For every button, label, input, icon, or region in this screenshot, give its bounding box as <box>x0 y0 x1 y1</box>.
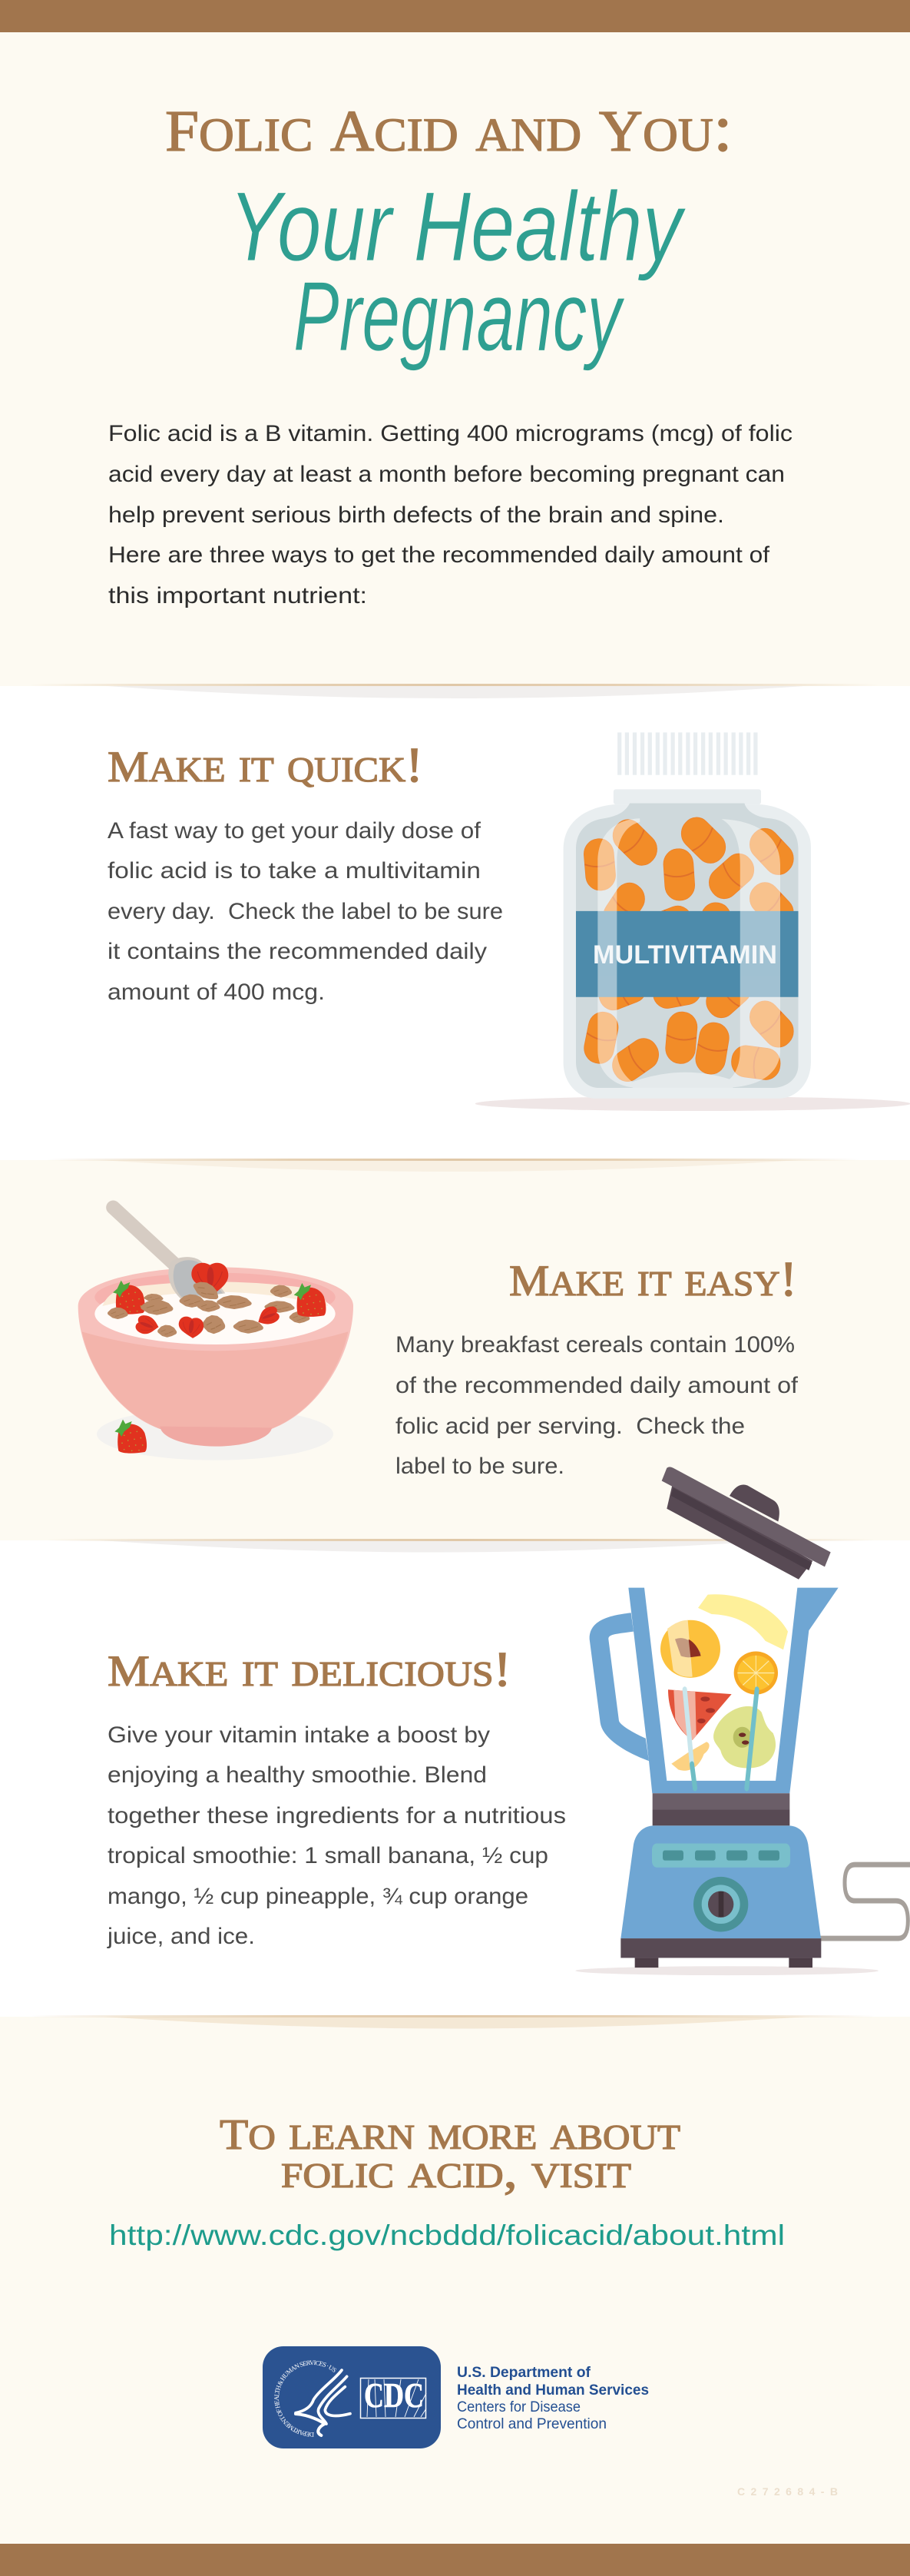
text block: make it quick: folic acid is to take a multivitamin <box>108 858 481 884</box>
jar label <box>576 911 799 997</box>
heading: to learn more: To learn more about <box>220 2105 680 2160</box>
jar label text: MULTIVITAMIN <box>593 940 777 970</box>
strawberries in milk <box>114 1283 326 1454</box>
icon: blender <box>575 1467 910 1975</box>
text block: make it delicious: enjoying a healthy smoothie. Blend <box>108 1762 487 1788</box>
icon: multivitamin jar <box>475 732 910 1111</box>
title line: Pregnancy: Pregnancy <box>293 262 625 372</box>
divider shadow: intro to quick <box>29 684 879 698</box>
blender jar <box>628 1588 839 1793</box>
panel: delicious section background <box>0 1540 910 2017</box>
spoon handle <box>113 1208 174 1264</box>
eagle mark <box>296 2370 350 2435</box>
seal ring text <box>274 2360 336 2437</box>
jar glass <box>564 804 811 1099</box>
CDC box: CDC <box>364 2375 424 2415</box>
divider shadow: easy to delicious <box>46 1539 875 1552</box>
text block: make it quick: A fast way to get your daily dose of <box>108 818 481 844</box>
bowl ground shadow <box>97 1408 333 1460</box>
pills <box>581 811 799 1087</box>
logo: organization names: Centers for Disease <box>457 2399 581 2415</box>
logo: organization names: Control and Prevention <box>457 2415 607 2432</box>
text block: make it easy: Many breakfast cereals contain 100% <box>395 1332 795 1358</box>
fruit: peach <box>660 1620 720 1678</box>
blender lid <box>662 1467 831 1580</box>
title line: Folic Acid and You: Folic Acid and You: <box>165 91 733 165</box>
logo: organization names <box>457 2364 649 2432</box>
intro text block: Folic acid is a B vitamin. Getting 400 micrograms (mcg) of folic <box>108 421 793 446</box>
intro text block <box>108 421 793 608</box>
seal ring text: DEPARTMENT OF HEALTH & HUMAN SERVICES · USA <box>274 2360 336 2437</box>
power cord <box>820 1865 910 1938</box>
blender base <box>620 1825 821 1968</box>
blender collar <box>653 1793 789 1825</box>
intro text block: acid every day at least a month before becoming pregnant can <box>108 462 785 487</box>
cereal flakes <box>110 1281 308 1335</box>
logo: organization names: Health and Human Services <box>457 2382 649 2399</box>
spoon bowl <box>168 1257 225 1300</box>
heading: make it delicious: Make it delicious! <box>108 1642 511 1697</box>
strawberries <box>113 1263 228 1315</box>
text block: make it quick: every day. Check the label to be sure <box>108 899 503 924</box>
heading: make it quick: Make it quick! <box>108 738 423 793</box>
fruit: pear <box>713 1706 776 1768</box>
text block: make it delicious: tropical smoothie: 1 small banana, ½ cup <box>108 1843 548 1868</box>
title line: Your Healthy: Your Healthy <box>229 172 687 282</box>
logo: HHS and CDC badge <box>263 2346 441 2448</box>
divider shadow: quick to easy <box>46 1159 860 1172</box>
intro text block: this important nutrient: <box>108 583 367 608</box>
top brown bar <box>0 0 910 32</box>
text block: make it easy: of the recommended daily amount of <box>395 1373 799 1398</box>
straws <box>685 1689 757 1788</box>
text block: make it quick: it contains the recommended daily <box>108 939 487 964</box>
intro text block: Here are three ways to get the recommended daily amount of <box>108 542 770 568</box>
icon: cereal bowl <box>78 1208 353 1460</box>
text block: make it quick <box>108 818 503 1005</box>
text block: make it delicious <box>107 1722 566 1949</box>
blender ground shadow <box>575 1966 879 1975</box>
fruit: small slice <box>671 1742 710 1771</box>
text block: make it easy: label to be sure. <box>395 1454 564 1479</box>
bottom brown bar <box>0 2544 910 2576</box>
text block: make it delicious: mango, ½ cup pineapple, ¾ cup orange <box>108 1884 528 1909</box>
fruit: orange slice <box>734 1651 778 1695</box>
jar ground shadow <box>475 1096 910 1111</box>
link text: http://www.cdc.gov/ncbddd/folicacid/about.html <box>109 2220 785 2251</box>
text block: make it delicious: together these ingredients for a nutritious <box>108 1803 566 1828</box>
text block: make it easy: folic acid per serving. Check the <box>395 1414 745 1439</box>
bowl rim and body <box>78 1267 353 1447</box>
title <box>165 91 733 372</box>
fruit: banana <box>698 1594 788 1649</box>
milk <box>94 1281 336 1344</box>
text block: make it quick: amount of 400 mcg. <box>108 980 325 1005</box>
blender handle <box>590 1613 649 1761</box>
divider shadow: delicious to footer <box>31 2015 875 2028</box>
heading: to learn more <box>220 2105 680 2198</box>
text block: make it delicious: Give your vitamin intake a boost by <box>108 1722 490 1748</box>
panel: quick section background <box>0 686 910 1160</box>
text block: make it easy <box>395 1332 799 1479</box>
heading: to learn more: folic acid, visit <box>281 2143 631 2198</box>
glass highlights <box>597 818 780 1088</box>
intro text block: help prevent serious birth defects of the brain and spine. <box>108 502 724 528</box>
logo: organization names: U.S. Department of <box>457 2364 591 2381</box>
publication code: C272684-B <box>737 2485 838 2498</box>
heading: make it easy: Make it easy! <box>509 1252 797 1307</box>
fruit: watermelon <box>668 1689 732 1740</box>
text block: make it delicious: juice, and ice. <box>107 1924 255 1949</box>
jar cap ridges <box>617 732 758 775</box>
